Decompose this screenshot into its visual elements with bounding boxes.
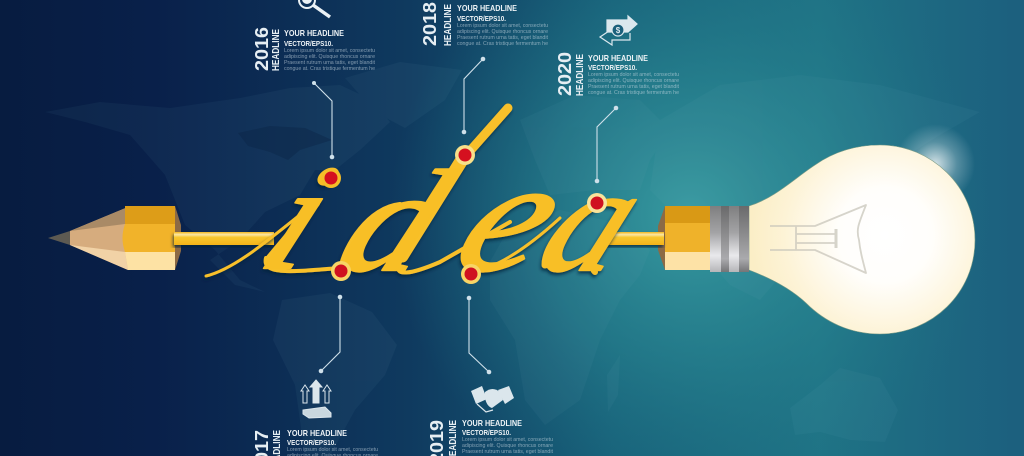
bulb filament xyxy=(770,205,866,273)
body 2020 xyxy=(588,72,680,96)
lamp base screw xyxy=(710,206,749,272)
bulb glass xyxy=(749,145,975,334)
body 2019: adipiscing elit. Quisque rhoncus ornare xyxy=(462,443,553,449)
connector line 2016 xyxy=(312,81,334,159)
headline 2020: YOUR HEADLINE xyxy=(588,53,648,63)
connector line 2020 xyxy=(595,106,618,183)
body 2016: congue at. Cras tristique fermentum he xyxy=(284,66,375,72)
icon: money arrows: $ xyxy=(616,26,621,35)
body 2020: congue at. Cras tristique fermentum he xyxy=(588,90,679,96)
light bulb flare xyxy=(895,124,975,204)
body 2018 xyxy=(457,23,549,47)
headline 2017: YOUR HEADLINE xyxy=(287,428,347,438)
block 2018 xyxy=(420,2,549,47)
year 2016: 2016 xyxy=(252,27,272,71)
year 2018: 2018 xyxy=(420,2,440,46)
pencil section at bulb xyxy=(658,206,711,270)
body 2018: adipiscing elit. Quisque rhoncus ornare xyxy=(457,29,548,35)
red marker on d ascender xyxy=(455,145,475,165)
body 2020: adipiscing elit. Quisque rhoncus ornare xyxy=(588,78,679,84)
body 2020: Praesent rutrum urna tatis, eget blandit xyxy=(588,84,680,90)
body 2016 xyxy=(284,48,376,72)
body 2016: Praesent rutrum urna tatis, eget blandit xyxy=(284,60,376,66)
side label 2020: HEADLINE xyxy=(575,54,586,96)
pencil wood xyxy=(70,207,128,270)
subhead 2016: VECTOR/EPS10. xyxy=(284,39,333,48)
body 2020: Lorem ipsum dolor sit amet, consectetu xyxy=(588,72,679,78)
body 2018: Lorem ipsum dolor sit amet, consectetu xyxy=(457,23,548,29)
icon: handshake xyxy=(471,386,514,412)
body 2019: Praesent rutrum urna tatis, eget blandit xyxy=(462,449,554,455)
body 2017 xyxy=(287,447,378,456)
headline 2018: YOUR HEADLINE xyxy=(457,3,517,13)
subhead 2020: VECTOR/EPS10. xyxy=(588,63,637,72)
block 2019 xyxy=(427,418,554,456)
body 2016: Lorem ipsum dolor sit amet, consectetu xyxy=(284,48,375,54)
year 2020: 2020 xyxy=(555,52,575,96)
pencil lead xyxy=(48,231,70,245)
left rod xyxy=(174,232,274,245)
pencil end cap xyxy=(175,206,181,270)
light bulb xyxy=(749,145,975,334)
pencil body xyxy=(122,206,175,270)
body 2017: Lorem ipsum dolor sit amet, consectetu xyxy=(287,447,378,453)
connector line 2017 xyxy=(319,295,342,373)
subhead 2019: VECTOR/EPS10. xyxy=(462,428,511,437)
block 2020 xyxy=(555,52,680,96)
body 2018: Praesent rutrum urna tatis, eget blandit xyxy=(457,35,549,41)
right rod xyxy=(606,232,664,245)
subhead 2017: VECTOR/EPS10. xyxy=(287,438,336,447)
body 2018: congue at. Cras tristique fermentum he xyxy=(457,41,548,47)
subhead 2018: VECTOR/EPS10. xyxy=(457,14,506,23)
connector line 2018 xyxy=(462,57,485,134)
headline 2019: YOUR HEADLINE xyxy=(462,418,522,428)
body 2019 xyxy=(462,437,554,455)
world map silhouette xyxy=(45,62,980,456)
icon: rising arrows over money xyxy=(301,380,331,418)
red marker on i dot xyxy=(321,168,341,188)
body 2019: Lorem ipsum dolor sit amet, consectetu xyxy=(462,437,553,443)
red marker on i foot xyxy=(331,261,351,281)
side label 2016: HEADLINE xyxy=(271,29,282,71)
red marker on a xyxy=(587,193,607,213)
headline 2016: YOUR HEADLINE xyxy=(284,28,344,38)
red marker on e foot xyxy=(461,264,481,284)
connector line 2019 xyxy=(467,296,491,374)
swash strokes joining the letters xyxy=(206,108,622,276)
letter a: a xyxy=(520,138,670,303)
icon: money arrows xyxy=(600,16,637,45)
word idea xyxy=(206,108,670,305)
pencil tip xyxy=(48,206,181,270)
icon: magnifier xyxy=(299,0,330,17)
letter e: e xyxy=(432,128,594,305)
letter i: i xyxy=(240,134,361,301)
letter d: d xyxy=(321,142,474,302)
block 2016 xyxy=(252,27,376,72)
body 2016: adipiscing elit. Quisque rhoncus ornare xyxy=(284,54,375,60)
block 2017 xyxy=(252,428,378,456)
